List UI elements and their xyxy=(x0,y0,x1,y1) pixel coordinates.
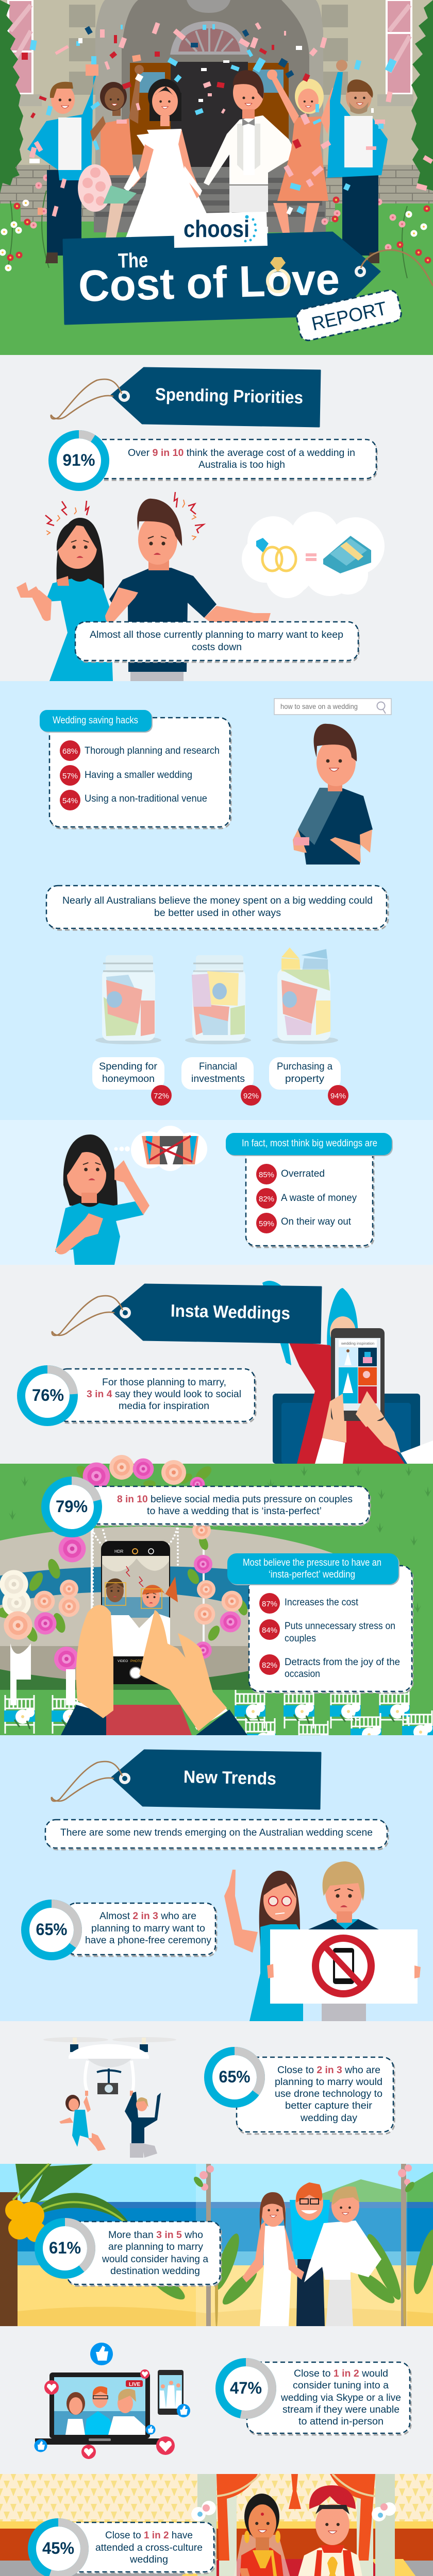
couple in viewfinder xyxy=(103,1566,178,1656)
stat 82: occasion xyxy=(285,1669,320,1680)
callout: 79 percent: 8 in 10 believe social media puts pressure on couples xyxy=(117,1494,353,1505)
panel: big weddings are xyxy=(226,1133,393,1247)
phone photographing couple: PORTRAIT xyxy=(145,1659,162,1663)
callout: keep costs down: Almost all those currently planning to marry want to keep xyxy=(90,630,343,640)
callout: cross-culture: Close to 1 in 2 have xyxy=(105,2530,193,2541)
pillars and curtains xyxy=(189,2474,404,2576)
panel: insta-perfect pressure xyxy=(227,1553,413,1693)
callout: keep costs down xyxy=(75,622,359,662)
stat 84: Puts unnecessary stress on xyxy=(285,1621,395,1632)
heading tag xyxy=(51,368,320,427)
stat 54: 54% xyxy=(62,796,78,805)
social icons xyxy=(34,2343,190,2459)
label: property: Purchasing a xyxy=(277,1061,332,1072)
callout: new trends intro xyxy=(45,1820,388,1850)
callout: cross-culture xyxy=(32,2522,215,2575)
callout: destination wedding: More than 3 in 5 who xyxy=(108,2230,203,2241)
couple hanging from drone xyxy=(59,2091,161,2158)
callout: cross-culture: wedding xyxy=(129,2554,168,2565)
stat 59 xyxy=(256,1213,352,1233)
grass tufts xyxy=(9,1466,431,1613)
callout: better used: be better used in other ways xyxy=(154,908,281,919)
choosi logo: choosi xyxy=(184,215,249,242)
carpet xyxy=(134,2559,433,2576)
stat 82: Detracts from the joy of the xyxy=(285,1657,400,1668)
stat 84: 84% xyxy=(262,1626,277,1635)
palm tree xyxy=(0,2164,134,2326)
callout: better used: Nearly all Australians believe the money spent on a big wedding could xyxy=(62,895,373,906)
panel: insta-perfect pressure: ‘insta-perfect’ wedding xyxy=(269,1569,355,1580)
stat 54 xyxy=(60,790,207,810)
callout: drone: wedding day xyxy=(300,2113,358,2124)
thought cloud: rings equal money xyxy=(242,512,385,598)
phone photographing couple: SQUARE xyxy=(158,1659,173,1663)
callout: destination wedding: are planning to marry xyxy=(108,2242,204,2252)
man worried xyxy=(57,499,271,681)
section: insta-perfect pressure garden xyxy=(0,1455,433,1759)
section: live stream xyxy=(0,2326,433,2474)
stat 82: 82% xyxy=(262,1661,277,1670)
title tag xyxy=(63,212,433,342)
section: destination wedding beach xyxy=(0,2164,433,2329)
callout: keep costs down: costs down xyxy=(192,642,242,653)
section: insta weddings xyxy=(0,1265,433,1464)
callout: 79 percent xyxy=(45,1481,370,1533)
woman thinking xyxy=(55,1134,149,1265)
laptop xyxy=(35,2372,163,2445)
phone with inspiration grid: wedding inspiration xyxy=(341,1341,374,1346)
label: property: 94% xyxy=(330,1092,346,1100)
icon: diamond ring xyxy=(268,257,289,292)
section: wedding saving hacks xyxy=(0,681,433,1120)
callout: phone-free ceremony xyxy=(25,1903,216,1956)
callout: 79 percent: 79% xyxy=(56,1497,88,1516)
stat 87 xyxy=(259,1593,359,1614)
heading tag xyxy=(52,1750,321,1809)
callout: destination wedding xyxy=(39,2222,221,2286)
bride in sari xyxy=(229,2494,293,2576)
label: investments: investments xyxy=(191,1074,245,1084)
phone photographing couple: HDR xyxy=(114,1549,124,1554)
stat 84 xyxy=(259,1619,395,1644)
fountain xyxy=(0,1527,381,1690)
callout: drone: use drone technology to xyxy=(275,2089,382,2099)
stat 57: 57% xyxy=(62,772,78,781)
jar: property xyxy=(272,947,338,1044)
callout: phone-free ceremony: have a phone-free ceremony xyxy=(85,1935,211,1946)
callout: destination wedding: would consider having a xyxy=(102,2254,208,2265)
callout: 91 percent: Over 9 in 10 think the average cost of a wedding in xyxy=(128,448,355,459)
callout: 91 percent: Australia is too high xyxy=(198,460,285,470)
search box: how to save on a wedding xyxy=(280,702,358,710)
callout: phone-free ceremony: planning to marry want to xyxy=(91,1923,205,1934)
drone with camera xyxy=(43,2037,176,2094)
red carpet xyxy=(106,1705,192,1735)
section: cross-culture wedding xyxy=(0,2474,433,2576)
bridesmaid left xyxy=(90,65,144,238)
stat 68: Thorough planning and research xyxy=(85,745,220,756)
title tag: Cost of Love xyxy=(78,255,340,311)
label: investments: 92% xyxy=(243,1092,259,1100)
panel: big weddings are: In fact, most think big weddings are xyxy=(242,1138,377,1149)
stat 87: 87% xyxy=(262,1600,277,1608)
callout: 76 percent: 76% xyxy=(32,1386,64,1404)
beach couple and guest xyxy=(242,2182,381,2326)
wedding chairs xyxy=(4,1690,433,1759)
callout: new trends intro: There are some new trends emerging on the Australian wedding scene xyxy=(60,1827,373,1838)
stat 59: 59% xyxy=(259,1219,274,1228)
bride xyxy=(124,79,218,238)
no phones sign xyxy=(267,1929,421,2004)
callout: live stream: wedding via Skype or a live xyxy=(280,2393,401,2403)
hedges xyxy=(0,0,433,193)
phone photographing couple: VIDEO xyxy=(118,1659,128,1663)
church arch and door xyxy=(95,0,323,170)
callout: phone-free ceremony: Almost 2 in 3 who are xyxy=(99,1911,196,1922)
label: property xyxy=(269,1057,348,1106)
heading tag: Insta Weddings xyxy=(171,1301,290,1324)
stat 85: 85% xyxy=(259,1171,274,1179)
stat 84: couples xyxy=(285,1633,316,1644)
groom in sherwani xyxy=(285,2485,371,2576)
phone photographing couple: PHOTO xyxy=(130,1659,142,1663)
section: big weddings are xyxy=(0,1120,433,1265)
label: honeymoon: 72% xyxy=(154,1092,169,1100)
callout: drone: better capture their xyxy=(285,2100,373,2111)
heading tag xyxy=(52,1284,321,1343)
callout: drone xyxy=(208,2051,394,2134)
callout: cross-culture: attended a cross-culture xyxy=(95,2543,203,2553)
callout: live stream xyxy=(220,2362,411,2435)
callout: live stream: to attend in-person xyxy=(298,2416,384,2427)
stat 87: Increases the cost xyxy=(285,1597,359,1608)
sea and sand xyxy=(0,2172,433,2326)
callout: live stream: 47% xyxy=(230,2379,262,2397)
section: new trends xyxy=(0,1735,433,2021)
callout: 91 percent xyxy=(53,434,377,487)
groomsman left xyxy=(27,64,98,263)
phone photographing couple xyxy=(61,1541,247,1735)
callout: drone: Close to 2 in 3 who are xyxy=(277,2065,380,2076)
report label: REPORT xyxy=(310,298,389,334)
stat 68 xyxy=(60,740,220,761)
steps xyxy=(94,167,326,232)
stat 57 xyxy=(60,765,192,786)
label: honeymoon xyxy=(92,1057,172,1106)
callout: 91 percent: 91% xyxy=(63,451,95,469)
bride browsing phone xyxy=(262,1281,433,1464)
grass and flowers xyxy=(0,174,433,340)
stat 82 xyxy=(256,1188,357,1209)
groom xyxy=(204,70,297,234)
callout: destination wedding: destination wedding xyxy=(110,2266,200,2277)
callout: 76 percent: media for inspiration xyxy=(119,1401,209,1412)
hero: church wedding scene xyxy=(0,0,433,355)
banana plants xyxy=(147,2227,433,2329)
callout: destination wedding: 61% xyxy=(49,2239,81,2257)
stress bolts xyxy=(45,492,204,540)
stat 82: A waste of money xyxy=(281,1193,357,1204)
search box xyxy=(274,699,391,715)
callout: 76 percent: For those planning to marry, xyxy=(102,1377,226,1388)
woman worried xyxy=(16,518,113,681)
jar: investments xyxy=(185,955,251,1044)
thought: no big wedding xyxy=(114,1126,207,1171)
jar: honeymoon xyxy=(95,955,161,1044)
callout: better used xyxy=(46,886,388,930)
phone stream xyxy=(158,2370,184,2415)
callout: live stream: Close to 1 in 2 would xyxy=(294,2368,388,2379)
panel: saving hacks xyxy=(40,710,231,828)
bouquet xyxy=(78,164,137,212)
stat 57: Having a smaller wedding xyxy=(85,770,192,781)
callout: live stream: stream if they were unable xyxy=(282,2404,399,2415)
callout: phone-free ceremony: 65% xyxy=(36,1920,67,1939)
callout: 76 percent: 3 in 4 say they would look to social xyxy=(87,1389,241,1400)
stat 85: Overrated xyxy=(281,1168,325,1179)
phone with inspiration grid xyxy=(331,1328,385,1421)
callout: 76 percent xyxy=(21,1369,256,1423)
church windows xyxy=(8,0,413,106)
section: spending priorities xyxy=(0,355,433,681)
confetti xyxy=(22,22,433,217)
bridesmaid right xyxy=(267,70,338,233)
stat 59: On their way out xyxy=(281,1216,352,1227)
callout: cross-culture: 45% xyxy=(42,2539,74,2557)
panel: saving hacks: Wedding saving hacks xyxy=(53,715,138,726)
callout: 79 percent: to have a wedding that is ‘insta-perfect’ xyxy=(147,1506,322,1517)
beach arch and veil xyxy=(192,2164,416,2326)
stat 82 xyxy=(259,1654,400,1680)
panel: insta-perfect pressure: Most believe the pressure to have an xyxy=(243,1557,381,1568)
heading tag: Spending Priorities xyxy=(155,385,303,408)
label: investments xyxy=(181,1057,261,1106)
callout: drone: planning to marry would xyxy=(275,2077,382,2088)
wedding arch flowers xyxy=(0,1455,249,1705)
stat 54: Using a non-traditional venue xyxy=(85,793,207,804)
report label xyxy=(295,289,403,342)
label: property: property xyxy=(285,1074,325,1084)
laptop: LIVE xyxy=(129,2382,141,2387)
man searching on phone xyxy=(293,724,373,865)
label: honeymoon: honeymoon xyxy=(102,1074,155,1084)
label: honeymoon: Spending for xyxy=(99,1061,158,1072)
title tag: The xyxy=(118,249,148,273)
stat 68: 68% xyxy=(62,747,78,756)
callout: live stream: consider tuning into a xyxy=(293,2380,389,2391)
callout: drone: 65% xyxy=(219,2067,251,2086)
heading tag: New Trends xyxy=(184,1767,276,1789)
stat 85 xyxy=(256,1164,325,1184)
label: investments: Financial xyxy=(199,1061,237,1072)
stone quoins xyxy=(69,5,348,95)
groomsman right xyxy=(327,60,388,263)
stat 82: 82% xyxy=(259,1195,274,1204)
couple with no phones sign xyxy=(224,1861,421,2021)
section: drone xyxy=(0,2021,433,2164)
